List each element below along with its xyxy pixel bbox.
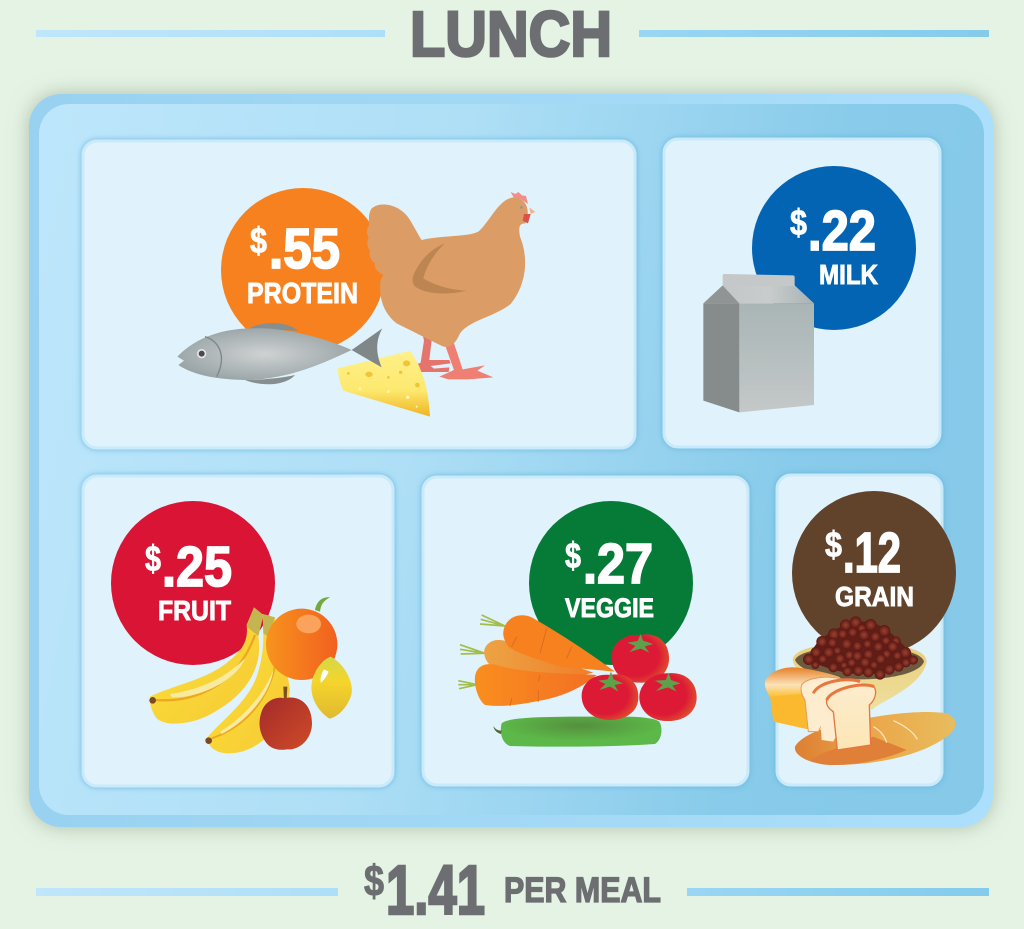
price badge: grain	[792, 491, 956, 655]
price badge: veggie: VEGGIE	[565, 593, 654, 623]
apple	[260, 687, 312, 750]
icon: fruit pile	[149, 597, 352, 753]
price badge: veggie: .27	[583, 532, 653, 596]
price badge: milk: $	[790, 202, 807, 243]
total: per meal	[36, 851, 989, 929]
icon: grains and bread	[765, 617, 955, 765]
banana two	[205, 614, 290, 753]
price badge: grain: GRAIN	[835, 581, 914, 612]
carrots	[458, 615, 615, 706]
total: per meal: $	[364, 857, 384, 906]
price badge: fruit: FRUIT	[158, 595, 231, 626]
bread loaf	[765, 667, 862, 742]
price badge: milk: .22	[808, 199, 876, 263]
price badge: fruit: .25	[162, 535, 232, 599]
price badge: grain: .12	[843, 521, 901, 585]
banana one	[149, 607, 263, 724]
panel: fruit compartment	[83, 476, 393, 786]
title: LUNCH	[36, 0, 989, 70]
icon: milk carton	[703, 274, 814, 412]
bowl	[793, 643, 927, 710]
icon: vegetables	[458, 615, 697, 747]
price badge: protein: $	[250, 220, 267, 261]
icon: cheese	[338, 328, 430, 417]
panel: grain compartment	[777, 475, 942, 785]
cucumber	[501, 716, 661, 747]
price badge: fruit	[111, 501, 275, 665]
price badge: grain: $	[825, 524, 842, 565]
price badge: milk: MILK	[819, 259, 878, 290]
icon: fish	[177, 323, 352, 384]
price badge: protein: PROTEIN	[247, 278, 358, 310]
lunch tray	[29, 94, 993, 827]
orange	[266, 597, 337, 680]
total: per meal: PER MEAL	[504, 871, 661, 910]
price badge: protein	[221, 188, 385, 352]
tomato top	[612, 634, 669, 683]
baguette	[795, 712, 955, 765]
price badge: veggie	[529, 501, 693, 665]
title: LUNCH: LUNCH	[410, 0, 612, 70]
lemon	[311, 657, 352, 719]
total: per meal: 1.41	[386, 851, 485, 929]
price badge: fruit: $	[145, 538, 161, 579]
price badge: protein: .55	[269, 217, 340, 281]
panel: veggie compartment	[423, 477, 748, 785]
tomato left	[582, 672, 638, 720]
price badge: milk	[752, 166, 916, 330]
beans	[803, 617, 918, 679]
icon: chicken	[367, 192, 535, 379]
price badge: veggie: $	[565, 535, 581, 576]
cucumber stem	[493, 726, 502, 734]
tomato right	[639, 673, 697, 721]
panel: milk compartment	[664, 139, 940, 447]
bread slice	[827, 685, 876, 750]
panel: protein compartment	[83, 141, 635, 448]
